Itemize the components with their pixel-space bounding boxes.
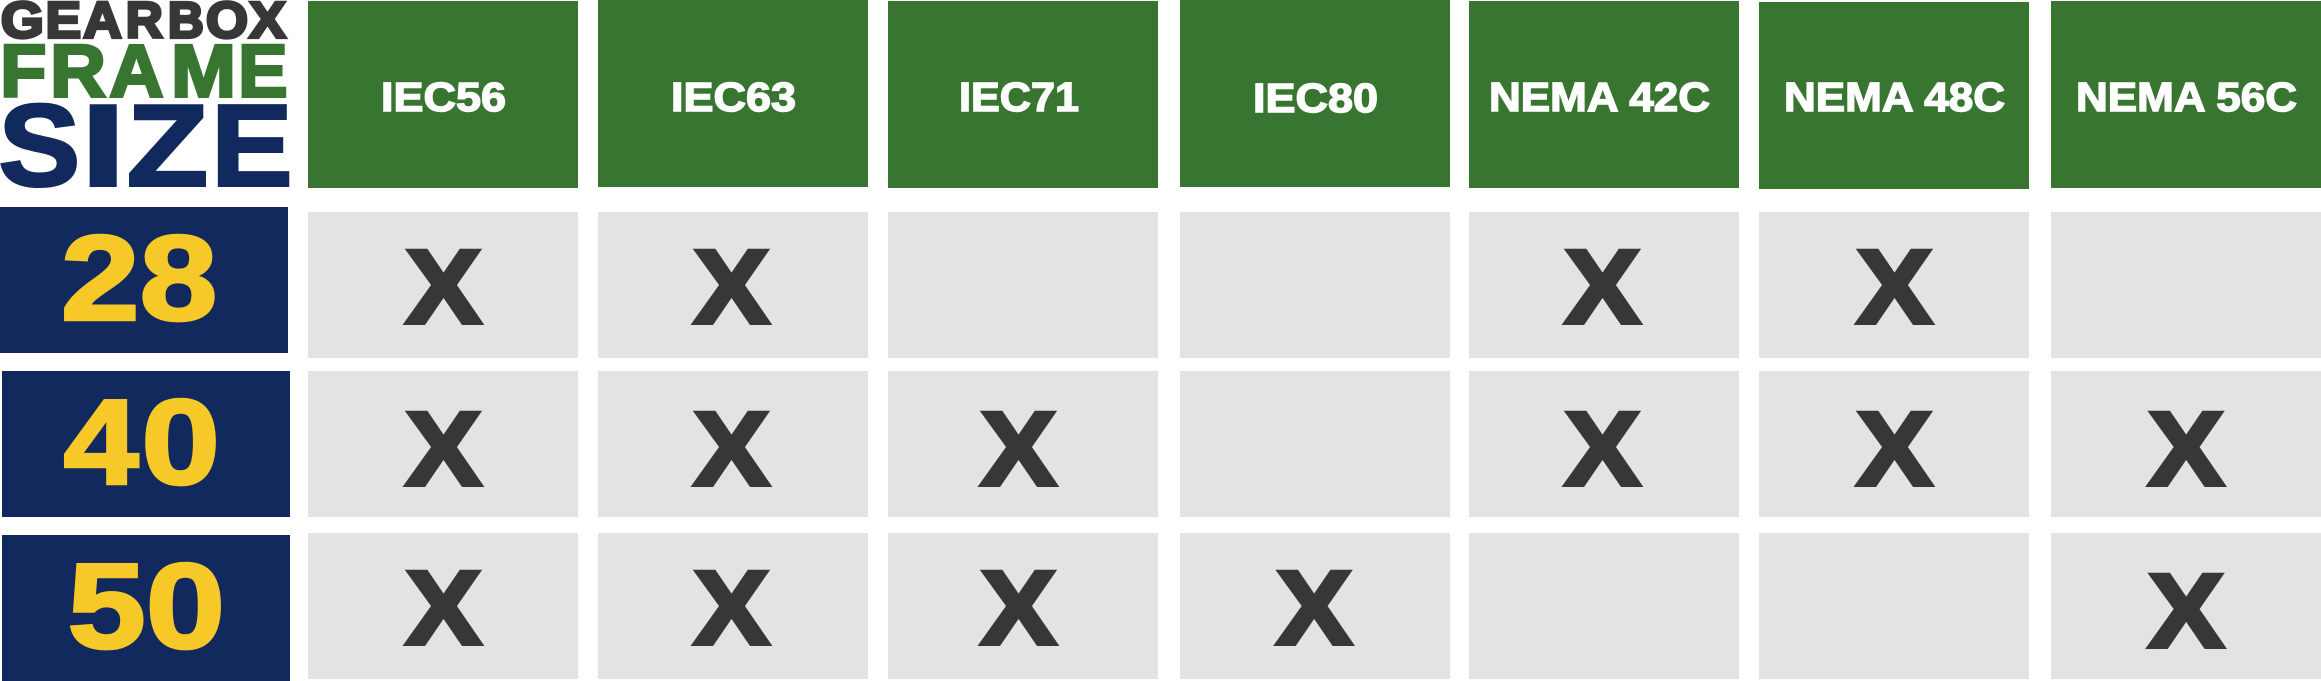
cell: 50 / IEC63: X (694, 550, 770, 667)
cell: 40 / IEC80 (1180, 371, 1450, 517)
row label: 28: 2 (61, 210, 140, 346)
row label: 28: 8 (140, 210, 217, 346)
cell: 50 / NEMA 42C (1469, 533, 1739, 679)
cell: 28 / IEC71 (888, 212, 1158, 358)
cell: 50 / NEMA 48C (1759, 533, 2029, 679)
title (0, 0, 292, 210)
title line: SIZE: S (0, 80, 80, 210)
row label: 40: 0 (141, 374, 220, 510)
cell: 40 / NEMA 48C (1759, 371, 2029, 517)
cell: 28 / IEC63: X (694, 229, 770, 346)
cell: 28 / NEMA 56C (2051, 212, 2321, 358)
cell: 40 / NEMA 56C (2051, 371, 2321, 517)
cell: 40 / NEMA 48C: X (1856, 391, 1932, 508)
header: NEMA 42C (1469, 1, 1739, 188)
cell: 50 / IEC71: X (980, 550, 1056, 667)
cell: 40 / IEC71: X (980, 391, 1056, 508)
header: IEC80: IEC80 (1253, 75, 1378, 121)
title line: SIZE: Z (127, 80, 208, 210)
row label: 40: 4 (64, 374, 139, 510)
cell: 50 / NEMA 56C (2051, 533, 2321, 679)
cell: 28 / NEMA 42C: X (1564, 229, 1640, 346)
title line: FRAME: A (109, 30, 164, 112)
title line: FRAME: F (0, 30, 47, 112)
header: IEC80 (1180, 0, 1450, 187)
title line: FRAME: E (238, 30, 288, 112)
header: IEC63 (598, 0, 868, 187)
cell: 50 / IEC56: X (406, 550, 482, 667)
cell: 50 / NEMA 56C: X (2148, 553, 2224, 670)
row label: 28 (0, 207, 288, 353)
title line: FRAME: R (50, 30, 106, 112)
row label: 50: 0 (146, 538, 225, 674)
cell: 50 / IEC80: X (1276, 550, 1352, 667)
header: NEMA 56C (2051, 1, 2321, 188)
cell: 50 / IEC56 (308, 533, 578, 679)
cell: 28 / NEMA 42C (1469, 212, 1739, 358)
cell: 50 / IEC71 (888, 533, 1158, 679)
cell: 40 / NEMA 42C: X (1564, 391, 1640, 508)
cell: 28 / IEC80 (1180, 212, 1450, 358)
header: NEMA 48C: NEMA 48C (1784, 74, 2005, 120)
header: IEC71: IEC71 (959, 74, 1079, 120)
cell: 28 / IEC56: X (406, 229, 482, 346)
cell: 28 / IEC63 (598, 212, 868, 358)
cell: 28 / NEMA 48C (1759, 212, 2029, 358)
title line: FRAME: M (171, 30, 236, 112)
cell: 40 / IEC63: X (694, 391, 770, 508)
header: NEMA 42C: NEMA 42C (1489, 74, 1710, 120)
cell: 40 / IEC71 (888, 371, 1158, 517)
header: IEC71 (888, 1, 1158, 188)
title line: SIZE: E (211, 80, 292, 210)
header: IEC63: IEC63 (671, 74, 796, 120)
cell: 40 / NEMA 56C: X (2148, 391, 2224, 508)
header: NEMA 48C (1759, 2, 2029, 189)
row label: 40 (2, 371, 290, 517)
cell: 40 / IEC56 (308, 371, 578, 517)
row label: 50: 5 (68, 538, 146, 674)
cell: 28 / NEMA 48C: X (1856, 229, 1932, 346)
cell: 50 / IEC63 (598, 533, 868, 679)
cell: 50 / IEC80 (1180, 533, 1450, 679)
header: NEMA 56C: NEMA 56C (2076, 74, 2297, 120)
title line: SIZE: I (81, 80, 125, 210)
cell: 28 / IEC56 (308, 212, 578, 358)
cell: 40 / NEMA 42C (1469, 371, 1739, 517)
header: IEC56 (308, 1, 578, 188)
cell: 40 / IEC63 (598, 371, 868, 517)
cell: 40 / IEC56: X (406, 391, 482, 508)
row label: 50 (2, 535, 290, 681)
header: IEC56: IEC56 (381, 74, 506, 120)
